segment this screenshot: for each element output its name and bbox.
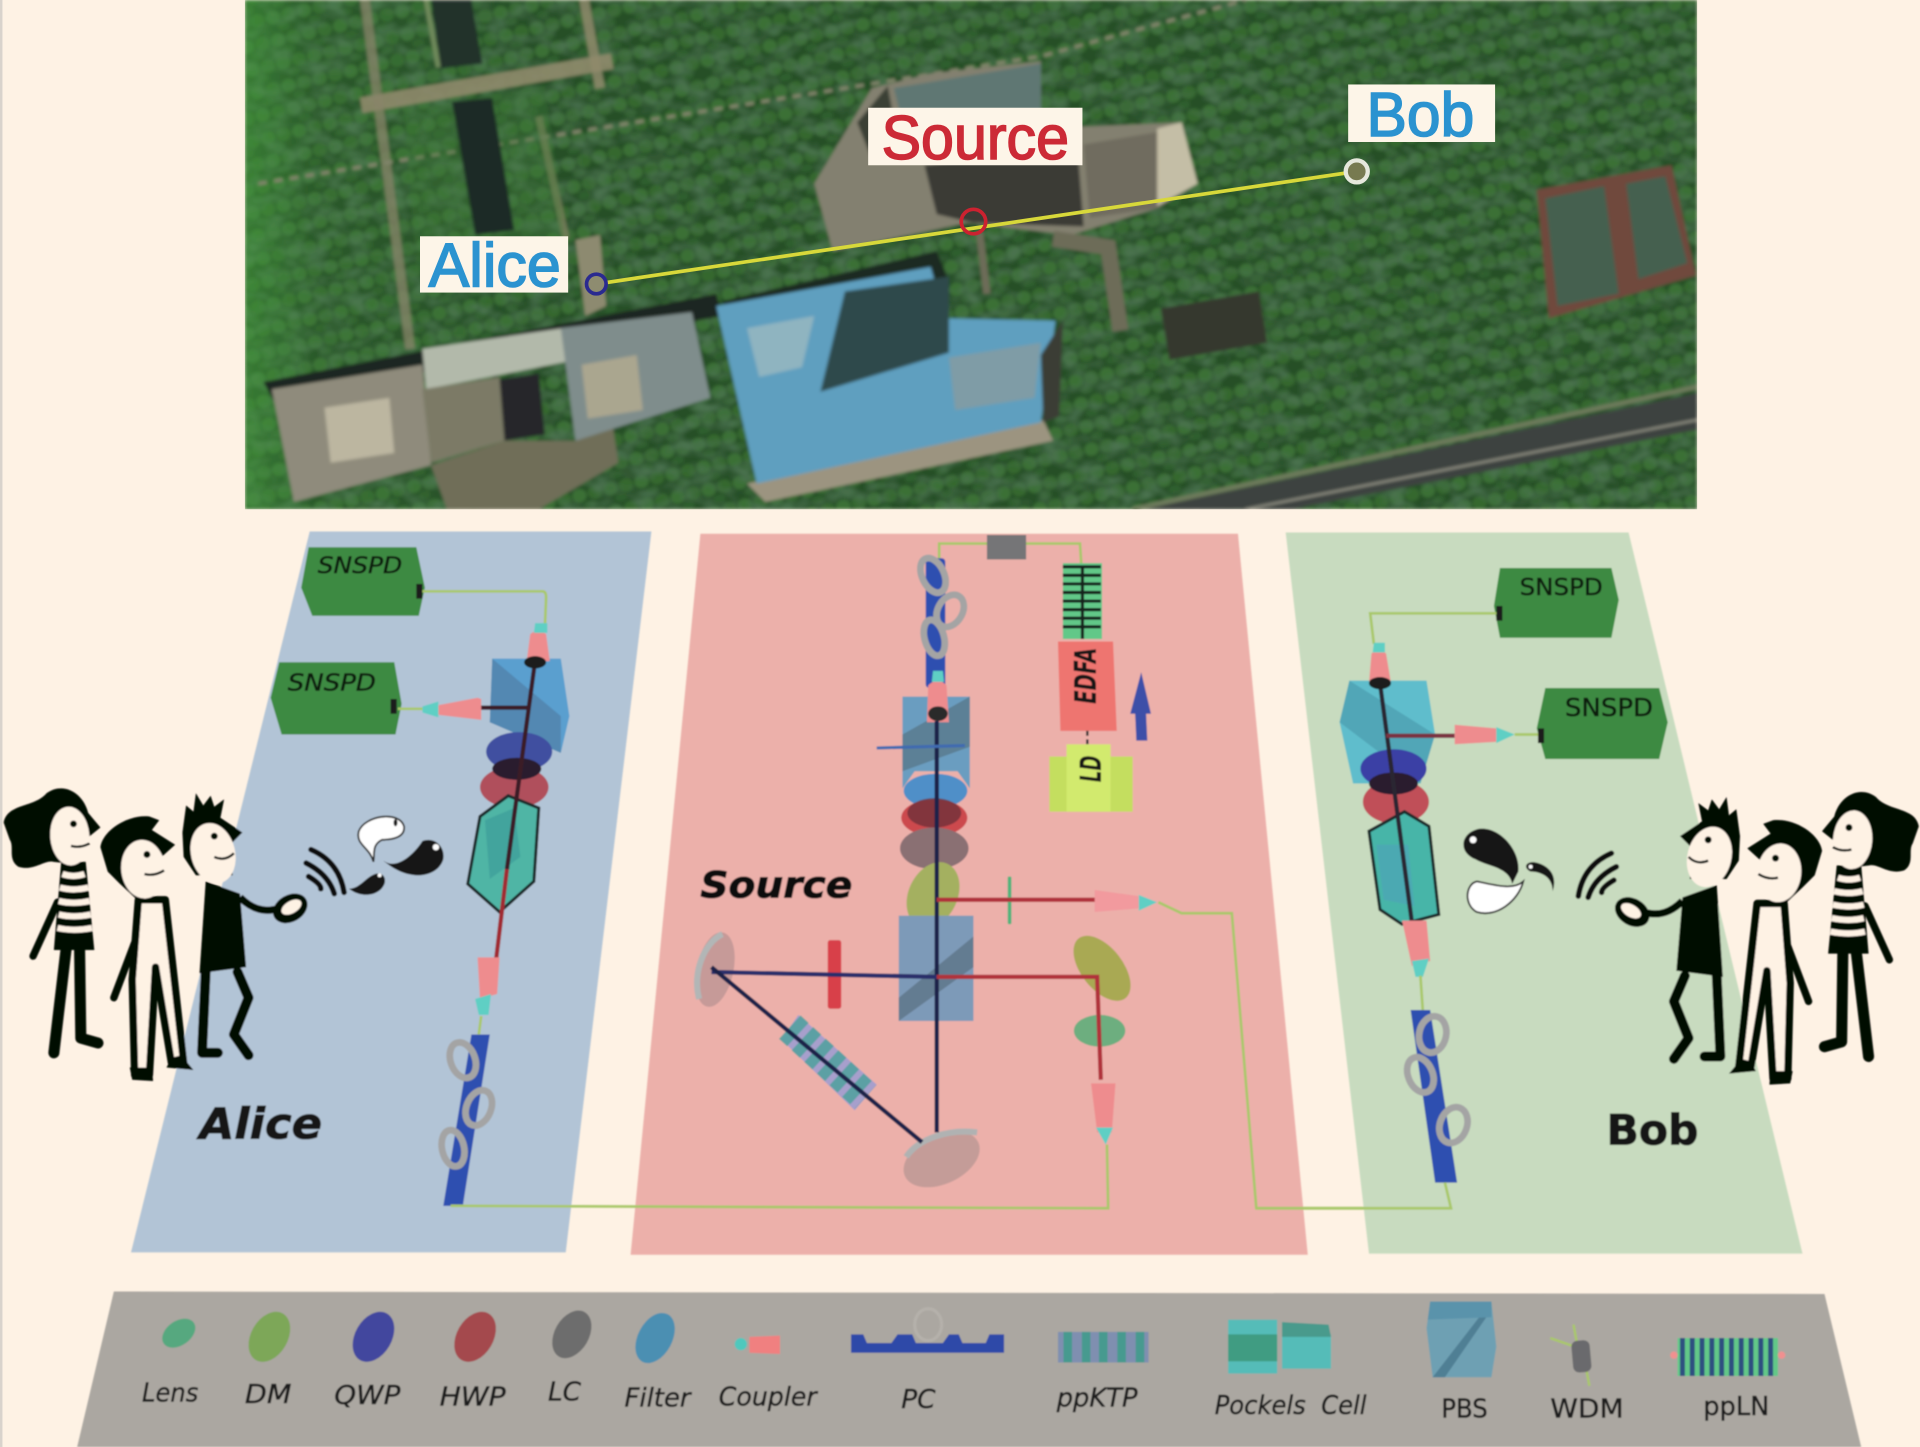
legend item: Pockels Cell: Pockels Cell: [1215, 1391, 1367, 1421]
detector: SNSPD upper: SNSPD: [1520, 574, 1603, 601]
icon: wireless waves: [1578, 853, 1616, 897]
coupler output: [475, 957, 500, 1015]
map label: Bob: [1348, 84, 1496, 142]
legend item: Lens: Lens: [142, 1379, 198, 1409]
photon tadpoles: Bob: [1463, 829, 1554, 913]
fiber from coupler to polarization controller: [479, 1016, 481, 1034]
map label: Source: Source: [882, 103, 1069, 173]
coupler top: [927, 671, 949, 722]
link line between sites: [596, 171, 1357, 284]
WDM: [939, 535, 1081, 563]
fiber to upper coupler: [1370, 613, 1496, 644]
legend item: PC: PC: [901, 1385, 936, 1415]
polarization controller: [438, 1034, 497, 1206]
legend item: QWP: [334, 1304, 403, 1411]
fiber to polarization controller: [1420, 976, 1423, 1011]
legend item: ppLN: ppLN: [1703, 1392, 1769, 1422]
legend item: HWP: HWP: [440, 1382, 506, 1412]
legend item: WDM: WDM: [1550, 1395, 1624, 1425]
waveplates: [480, 732, 552, 808]
icon: wireless waves: [306, 850, 344, 894]
fiber from controller to shared line: [1256, 1183, 1451, 1208]
detector: SNSPD lower: SNSPD: [1565, 693, 1653, 722]
paths and canals: [258, 0, 1245, 349]
people group: Bob side (mirrored): [1578, 792, 1919, 1085]
arrow: up: [1130, 672, 1151, 741]
detector: SNSPD lower: [271, 662, 402, 735]
beam path: [480, 661, 535, 961]
detector: SNSPD lower: [1537, 688, 1668, 759]
legend item: PBS: [1427, 1301, 1496, 1425]
legend item: PBS: PBS: [1441, 1395, 1488, 1425]
top building: [814, 61, 1198, 331]
panel: component legend: [77, 1292, 1861, 1447]
map label: Alice: Alice: [429, 230, 561, 300]
figure: man holding device: [182, 793, 313, 1055]
marker: Alice site: [587, 274, 606, 294]
EDFA amplifier: EDFA: [1069, 648, 1104, 704]
blue roof building: [716, 251, 1063, 502]
sports court: [1537, 165, 1696, 318]
left buildings: [263, 294, 722, 509]
polarization controller: [915, 554, 969, 688]
detector: SNSPD lower: SNSPD: [288, 669, 376, 696]
legend item: Filter: Filter: [624, 1384, 692, 1414]
connector to laser diode: [1086, 731, 1088, 747]
legend item: QWP: QWP: [334, 1381, 401, 1411]
panel heading: Alice: Alice: [196, 1100, 322, 1150]
panel: Alice: [131, 531, 651, 1252]
red filter: [828, 940, 841, 1009]
panel heading: Bob: Bob: [1607, 1106, 1698, 1155]
Pockels cell: [468, 796, 539, 912]
polarization controller: [1402, 1010, 1472, 1183]
thin lens: [1008, 877, 1011, 924]
coupler lower: [422, 698, 481, 720]
legend item: Coupler: Coupler: [719, 1382, 818, 1412]
legend item: WDM: [1550, 1325, 1624, 1425]
PBS cube: [490, 659, 569, 753]
PBS upper: [902, 697, 970, 788]
figure: man holding device: [1610, 797, 1740, 1059]
LD laser diode: LD: [1074, 755, 1108, 782]
Alice to source fiber: [451, 1145, 1108, 1208]
coupler right: [1095, 890, 1157, 912]
legend item: Filter: [624, 1306, 692, 1414]
road: [1133, 387, 1697, 509]
coupler upper: [1369, 643, 1391, 689]
dichroic mirror upper: [896, 853, 970, 936]
coupler upper: [524, 623, 550, 668]
fiber to lower coupler: [398, 708, 422, 710]
map label: Bob: Bob: [1367, 80, 1474, 150]
figure: man with cap: [1729, 820, 1822, 1085]
photon tadpoles: Alice: [349, 817, 444, 895]
legend item: Coupler: [719, 1336, 818, 1412]
people group: Alice side: [4, 788, 344, 1081]
panel: Bob: [1256, 533, 1802, 1254]
beam path: [1380, 683, 1455, 922]
ppKTP crystal: [781, 1015, 877, 1110]
fiber to lower detector: [1515, 733, 1538, 736]
PBS lower: [899, 916, 973, 1021]
lens right: [1074, 1015, 1125, 1047]
legend item: LC: [544, 1304, 600, 1407]
legend item: Pockels Cell: [1215, 1320, 1367, 1421]
coupler lower right: [1091, 1083, 1116, 1145]
fiber to upper coupler: [422, 591, 546, 627]
panel heading: Source: Source: [700, 863, 852, 906]
figure: woman with stripes: [1822, 792, 1919, 1056]
satellite map panel: [245, 0, 1697, 509]
detector: SNSPD upper: SNSPD: [318, 554, 402, 579]
waveplates: [1360, 749, 1429, 824]
mirror bottom: [895, 1120, 989, 1199]
legend item: ppKTP: [1056, 1332, 1149, 1414]
legend item: Lens: [142, 1313, 201, 1409]
detector: SNSPD upper: [301, 547, 425, 616]
figure: woman with stripes: [4, 788, 100, 1053]
Pockels cell: [1369, 812, 1439, 924]
EDFA amplifier: [1058, 641, 1117, 731]
beam paths: [711, 721, 1101, 1142]
legend item: HWP: [440, 1304, 506, 1412]
marker: Source site: [961, 209, 986, 234]
detector: SNSPD upper: [1494, 568, 1619, 638]
mirror left: [689, 929, 741, 1011]
coupler horizontal: [1455, 725, 1515, 744]
dichroic mirror right: [1062, 926, 1142, 1011]
legend item: DM: DM: [245, 1380, 291, 1410]
output fiber to Bob: [1158, 902, 1445, 1208]
filter, HWP and LC stack: [900, 774, 969, 869]
legend item: LC: LC: [548, 1377, 581, 1407]
LD laser diode: [1049, 744, 1133, 812]
legend item: DM: [240, 1304, 299, 1410]
figure: man with cap: [100, 816, 193, 1081]
PBS cube: [1340, 681, 1435, 783]
coupler lower: [1402, 921, 1430, 977]
legend item: ppLN: [1670, 1338, 1785, 1422]
ppLN crystal: [1063, 563, 1102, 639]
legend item: ppKTP: ppKTP: [1056, 1384, 1138, 1414]
panel: Source: [631, 534, 1445, 1255]
marker: Bob site: [1346, 160, 1368, 182]
legend item: PC: [851, 1309, 1004, 1415]
